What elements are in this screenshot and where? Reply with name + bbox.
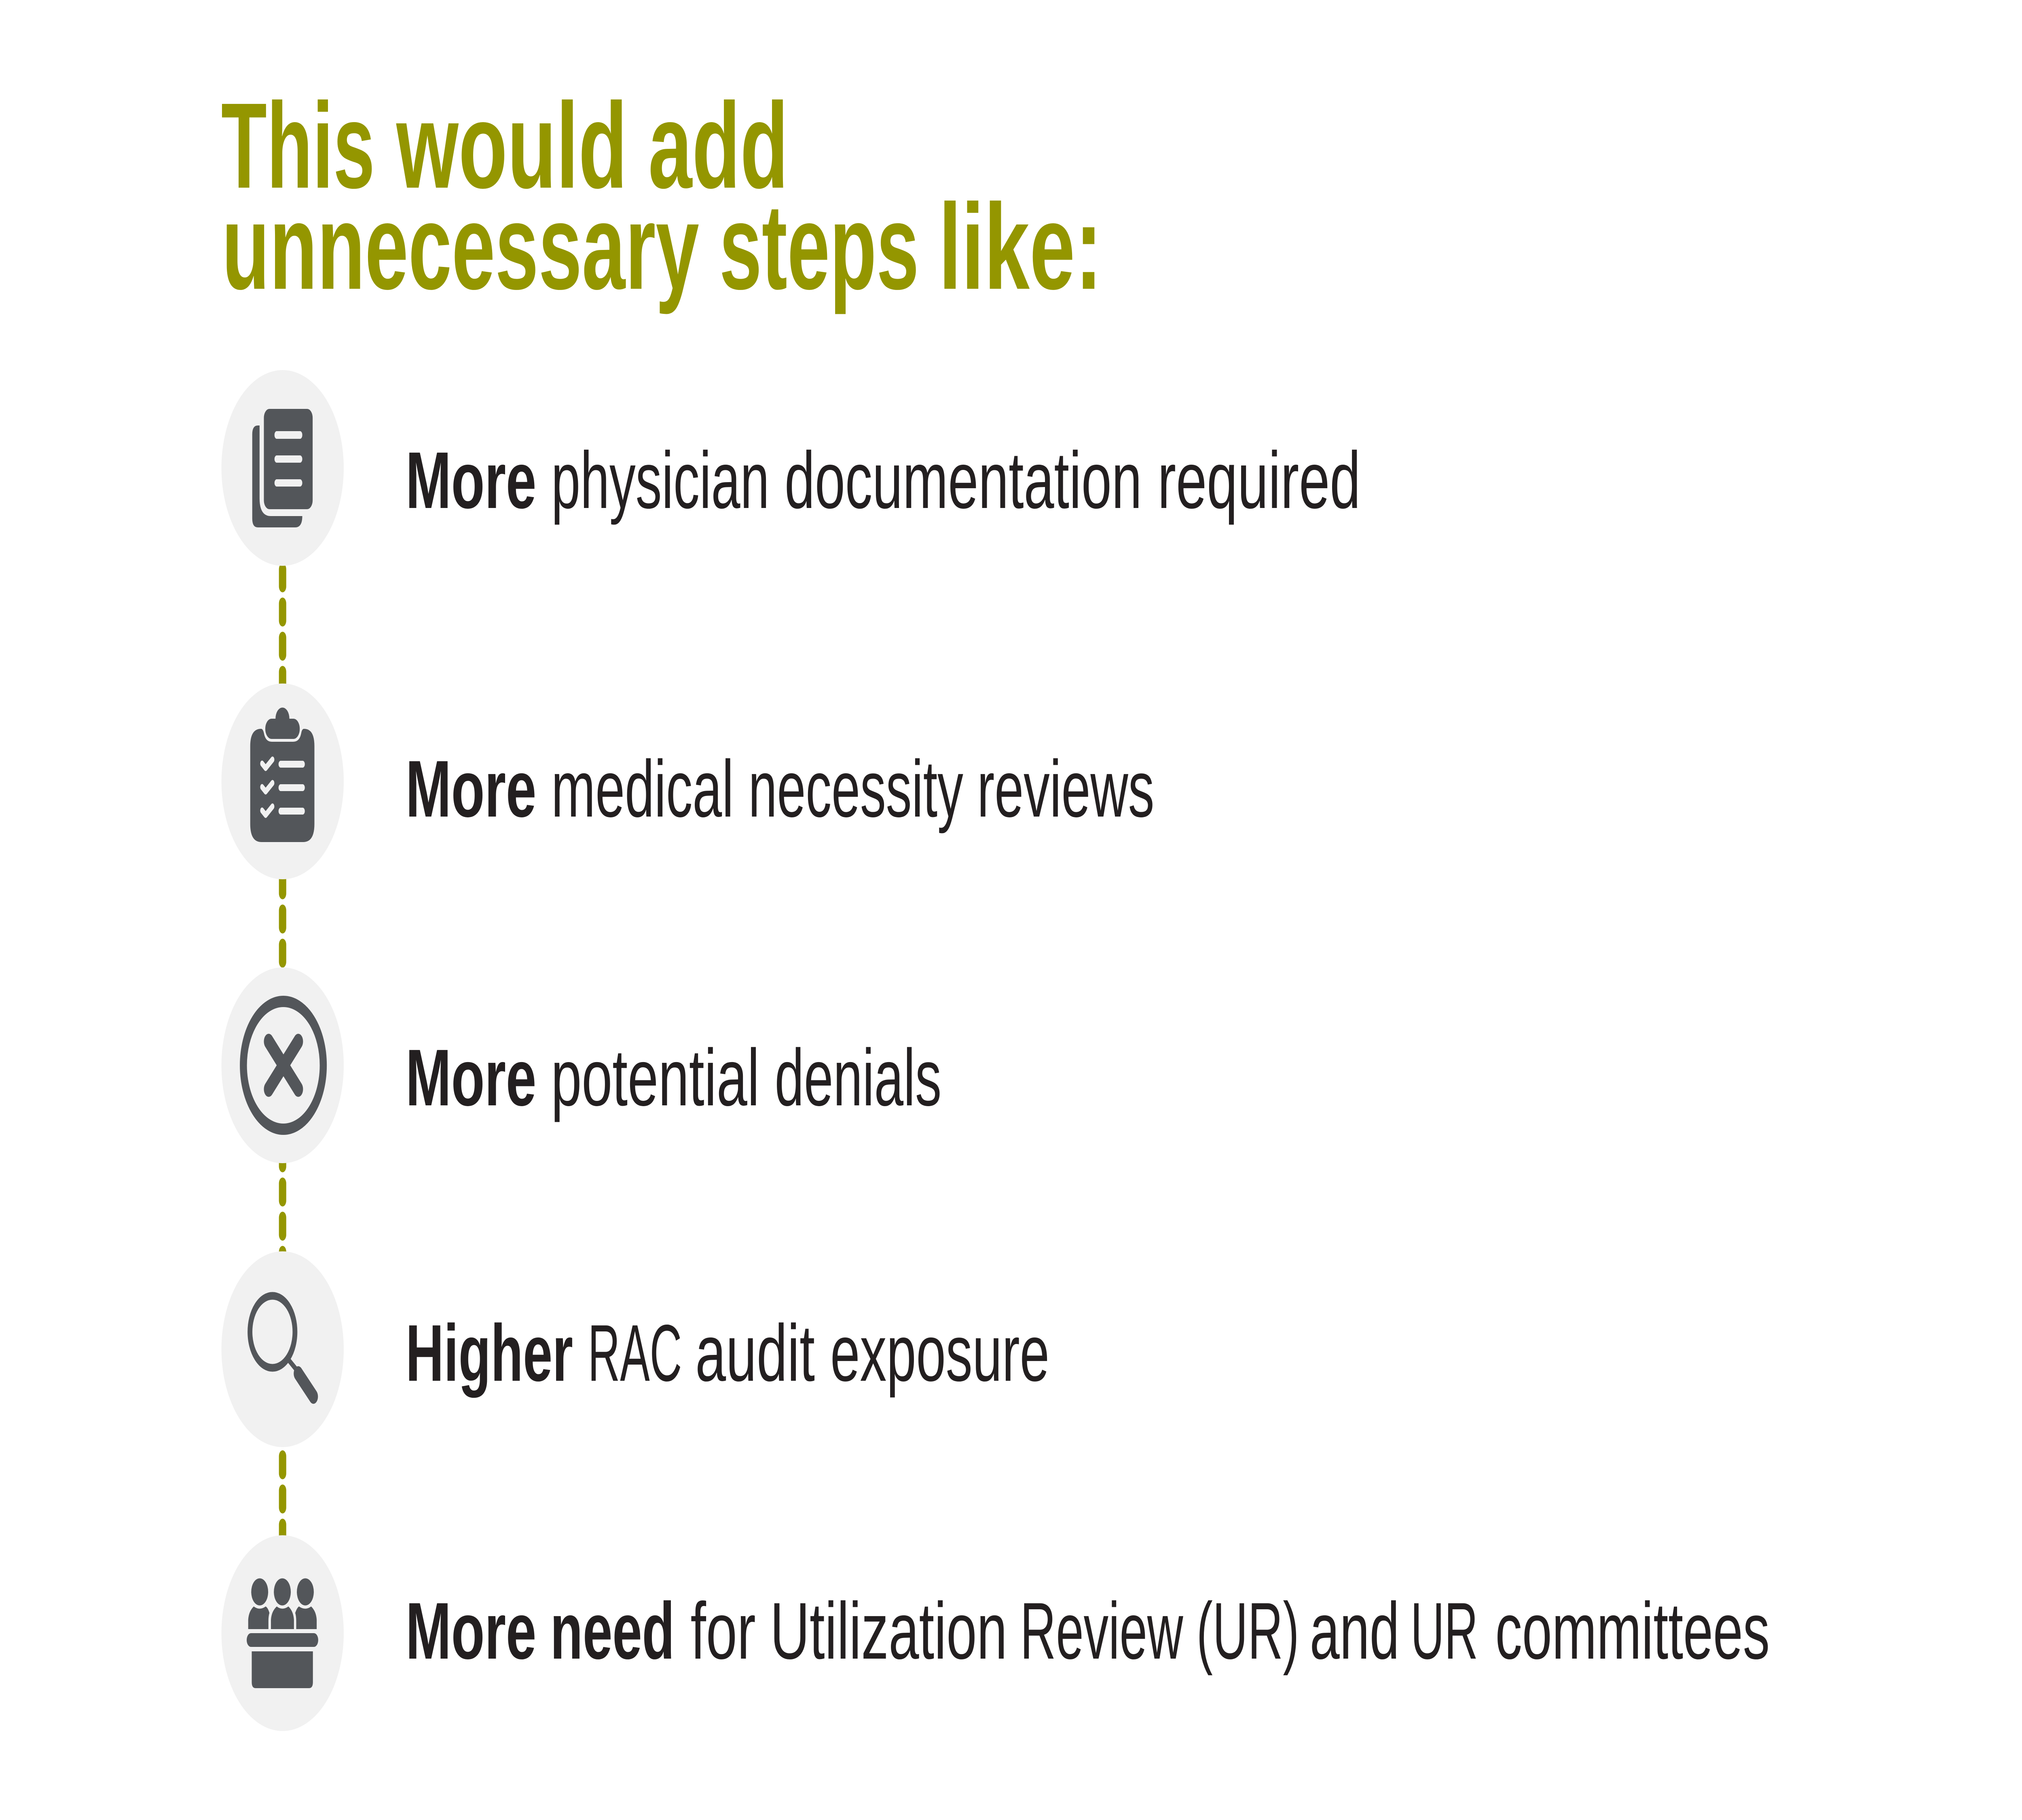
text: more medical necessity reviews: medical xyxy=(551,744,734,834)
text: more need for utilization review and ur committees: need xyxy=(550,1586,675,1676)
text: more need for utilization review and ur committees: (UR) xyxy=(1197,1586,1299,1676)
text: more potential denials xyxy=(406,1033,941,1123)
text: more need for utilization review and ur committees: Utilization xyxy=(770,1586,1007,1676)
icon: clipboard checklist xyxy=(222,684,344,879)
text: higher rac audit exposure: exposure xyxy=(830,1308,1049,1398)
text: more need for utilization review and ur committees: Review xyxy=(1020,1586,1183,1676)
text: more need for utilization review and ur committees: and xyxy=(1310,1586,1400,1676)
icon: documents xyxy=(222,370,344,566)
row: utilization review committees xyxy=(222,1535,1770,1731)
text: more medical necessity reviews: reviews xyxy=(977,744,1154,834)
title: steps xyxy=(719,179,919,315)
text: higher rac audit exposure xyxy=(406,1308,1049,1398)
dashed connector line xyxy=(277,569,288,1541)
title: add xyxy=(648,78,788,214)
text: more need for utilization review and ur committees xyxy=(406,1586,1770,1676)
text: more medical necessity reviews: necessity xyxy=(749,744,963,834)
text: more need for utilization review and ur committees: More xyxy=(406,1586,536,1676)
text: more physician documentation required xyxy=(406,436,1360,525)
row: potential denials xyxy=(222,967,941,1163)
text: more potential denials: denials xyxy=(775,1033,941,1123)
text: more need for utilization review and ur committees: for xyxy=(691,1586,756,1676)
text: more potential denials: More xyxy=(406,1033,536,1123)
text: higher rac audit exposure: RAC xyxy=(588,1308,682,1398)
text: more medical necessity reviews: More xyxy=(406,744,536,834)
title: unnecessary xyxy=(222,179,699,315)
row: medical necessity reviews xyxy=(222,684,1154,879)
text: more physician documentation required: documentation xyxy=(785,436,1142,525)
text: more physician documentation required: required xyxy=(1157,436,1360,525)
title xyxy=(221,78,1102,315)
text: higher rac audit exposure: Higher xyxy=(406,1308,573,1398)
title: would xyxy=(396,78,627,214)
row: rac audit exposure xyxy=(222,1251,1049,1447)
text: more potential denials: potential xyxy=(551,1033,759,1123)
text: more physician documentation required: physician xyxy=(551,436,770,525)
title: like: xyxy=(939,179,1102,315)
text: more physician documentation required: More xyxy=(406,436,536,525)
icon: committee people at table xyxy=(222,1535,344,1731)
text: more medical necessity reviews xyxy=(406,744,1154,834)
row: physician documentation xyxy=(222,370,1360,566)
icon: magnifying glass xyxy=(222,1251,344,1447)
title: This xyxy=(221,78,375,214)
icon: circled x xyxy=(222,967,344,1163)
text: more need for utilization review and ur committees: UR xyxy=(1411,1586,1478,1676)
text: higher rac audit exposure: audit xyxy=(695,1308,815,1398)
text: more need for utilization review and ur committees: committees xyxy=(1495,1586,1770,1676)
